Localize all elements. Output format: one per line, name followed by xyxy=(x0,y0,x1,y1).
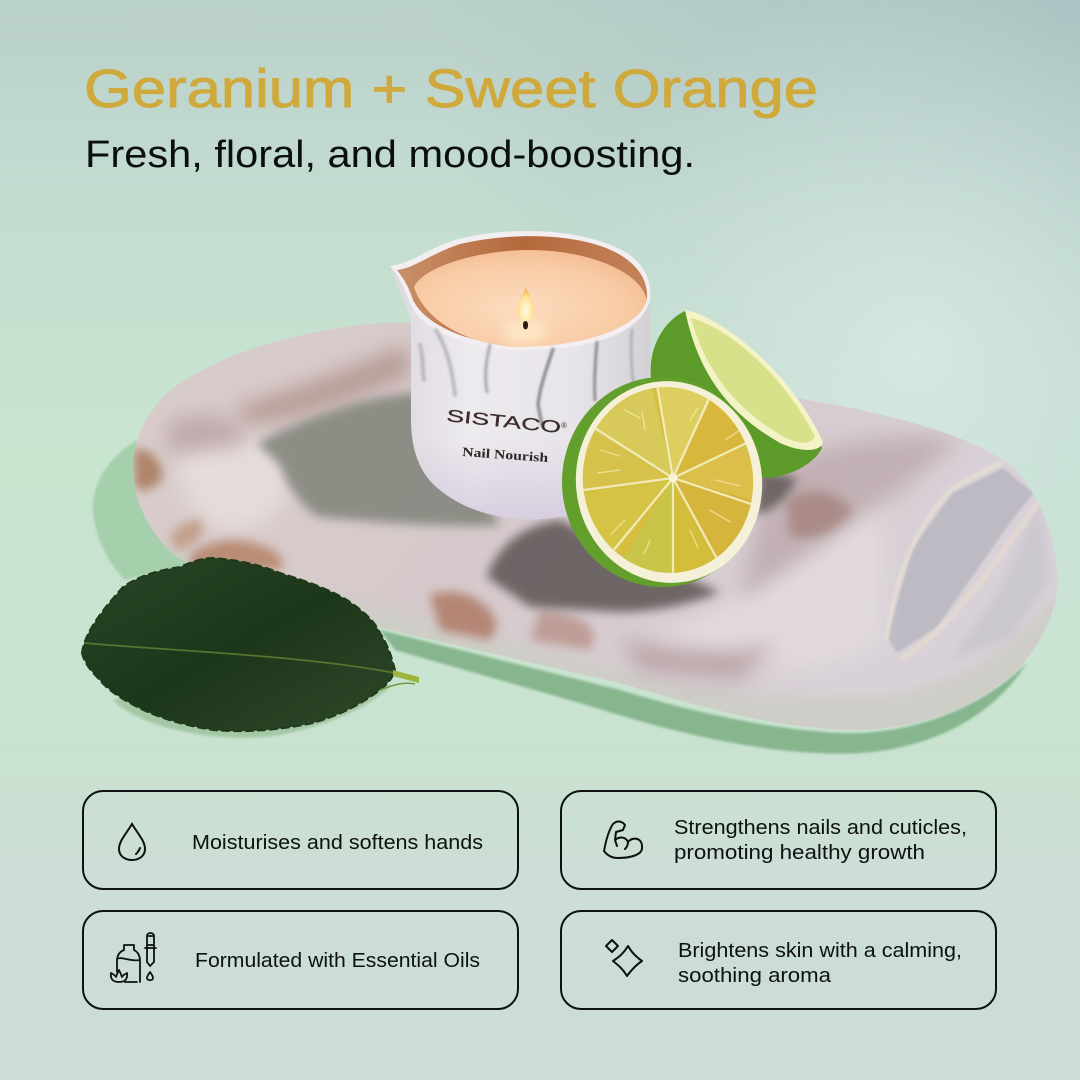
subtitle: Fresh, floral, and mood-boosting. xyxy=(85,134,695,176)
marble veins xyxy=(420,330,634,425)
cast shadow of limes xyxy=(487,520,720,612)
back lime half xyxy=(651,310,823,478)
text: strengthens: promoting healthy growth xyxy=(674,842,925,864)
brown blotches xyxy=(134,449,162,490)
card: brightens xyxy=(561,911,996,1009)
board edge band xyxy=(176,554,1056,730)
text: brightens xyxy=(678,940,962,987)
candle flame xyxy=(503,288,547,344)
text: brightens: soothing aroma xyxy=(678,965,832,987)
card: essential oils xyxy=(83,911,518,1009)
icon: sparkles xyxy=(606,940,642,976)
text: brightens: Brightens skin with a calming, xyxy=(678,940,962,962)
brand label xyxy=(446,406,567,465)
text: essential oils: Formulated with Essential Oils xyxy=(195,950,480,972)
icon: water drop xyxy=(119,824,145,860)
candle tin xyxy=(390,231,651,519)
title: Geranium + Sweet Orange xyxy=(84,59,818,119)
board cast shadow xyxy=(93,440,1027,754)
marble board xyxy=(133,322,1060,740)
front lime half xyxy=(562,378,762,587)
grey veins on the right xyxy=(887,468,1033,653)
text: strengthens xyxy=(674,817,967,864)
brand label: ® xyxy=(561,421,567,430)
mauve marble bands xyxy=(740,436,960,600)
brand label: SISTACO xyxy=(446,406,562,437)
text: strengthens: Strengthens nails and cuticles, xyxy=(674,817,967,839)
icon: flexed arm xyxy=(604,821,642,858)
lime wedges xyxy=(582,387,754,573)
cast shadow of candle xyxy=(257,392,500,526)
text: moisturises: Moisturises and softens hands xyxy=(192,832,483,854)
card: moisturises xyxy=(83,791,518,889)
icon: oil bottle and dropper xyxy=(111,933,156,982)
product photo xyxy=(82,231,1060,754)
light patches xyxy=(179,436,288,530)
leaf xyxy=(82,558,419,738)
brand label: Nail Nourish xyxy=(462,444,550,465)
card: strengthens xyxy=(561,791,996,889)
